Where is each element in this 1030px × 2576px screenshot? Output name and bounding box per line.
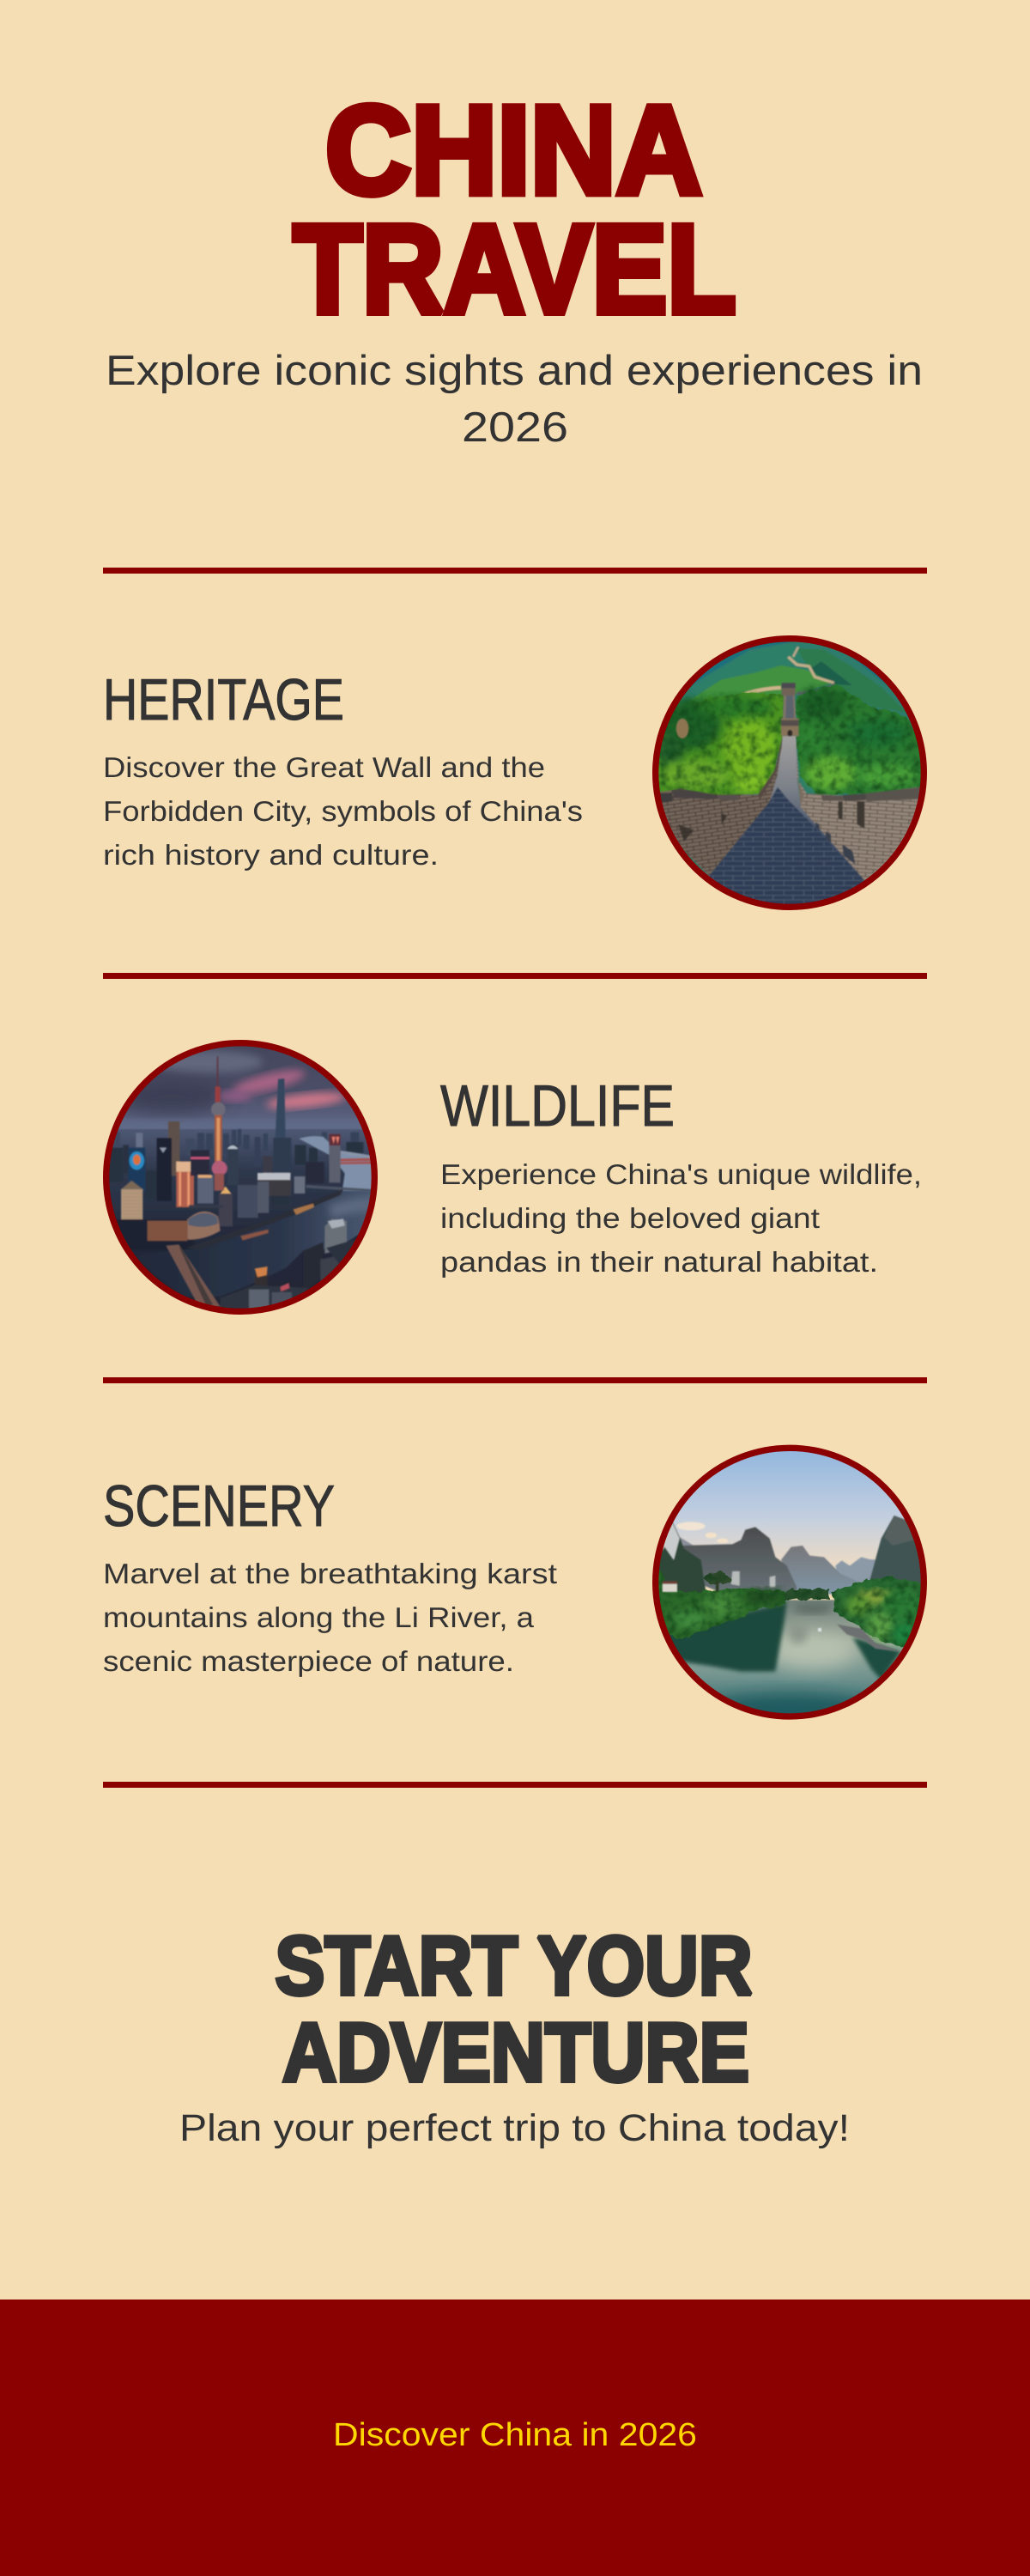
heading: start your adventure: START YOUR	[275, 1918, 752, 2013]
ring	[656, 639, 924, 907]
image: shanghai skyline	[103, 1039, 378, 1315]
image: li river	[652, 1445, 927, 1728]
far towers and narrow wall	[781, 687, 797, 696]
city base	[103, 1129, 378, 1315]
foreground right buildings	[324, 1218, 347, 1254]
riverside bridge far	[306, 1185, 371, 1192]
title	[294, 80, 736, 340]
right parapet	[796, 741, 920, 881]
call to action	[179, 1918, 850, 2149]
footer	[0, 2300, 1030, 2576]
subtitle	[106, 348, 923, 451]
heading: wildlife: WILDLIFE	[440, 1073, 675, 1139]
text block: scenery	[103, 1558, 557, 1677]
image: great wall	[652, 635, 927, 910]
heading: start your adventure: ADVENTURE	[282, 2006, 749, 2099]
heading: scenery: SCENERY	[103, 1473, 335, 1539]
text: plan your trip: Plan your perfect trip to China today!	[179, 2107, 850, 2149]
river	[683, 1599, 904, 1710]
panel: wildlife	[103, 1039, 922, 1315]
header	[106, 80, 923, 451]
text block: heritage: Forbidden City, symbols of China's	[103, 795, 583, 827]
ring	[106, 1043, 374, 1311]
text block: heritage: rich history and culture.	[103, 839, 439, 871]
divider	[103, 568, 927, 574]
text block: heritage: Discover the Great Wall and the	[103, 751, 545, 783]
text block: scenery: mountains along the Li River, a	[103, 1601, 535, 1633]
river	[165, 1190, 371, 1297]
river reflections	[652, 1603, 787, 1672]
text block: scenery: scenic masterpiece of nature.	[103, 1645, 514, 1677]
foreground towers left	[168, 1121, 179, 1176]
text block: wildlife: including the beloved giant	[440, 1202, 820, 1234]
oriental pearl tower	[216, 1056, 219, 1086]
text block: heritage	[103, 751, 583, 871]
left and right forest	[652, 684, 927, 801]
panel: scenery	[103, 1445, 927, 1728]
subtitle: 2026	[462, 404, 568, 451]
text block: wildlife: Experience China's unique wildlife,	[440, 1158, 922, 1190]
title: TRAVEL	[294, 199, 736, 340]
divider	[103, 1782, 927, 1788]
text block: wildlife	[440, 1158, 922, 1278]
low buildings	[103, 1219, 195, 1251]
far river bend	[299, 1135, 372, 1192]
footer text: Discover China in 2026	[333, 2417, 697, 2453]
shanghai tower	[276, 1078, 286, 1139]
text block: wildlife: pandas in their natural habitat.	[440, 1246, 878, 1278]
title: CHINA	[325, 80, 702, 221]
heading: start your adventure	[275, 1918, 752, 2099]
ring	[656, 1448, 924, 1716]
left parapet	[660, 748, 780, 876]
tree banks	[652, 1569, 927, 1649]
subtitle: Explore iconic sights and experiences in	[106, 348, 923, 394]
panel: heritage	[103, 635, 927, 910]
bridge	[166, 1244, 221, 1307]
footer band	[0, 2300, 1030, 2576]
text block: scenery: Marvel at the breathtaking karst	[103, 1558, 557, 1589]
heading: heritage: HERITAGE	[103, 667, 344, 732]
walkway	[709, 736, 869, 910]
divider	[103, 973, 927, 979]
divider	[103, 1377, 927, 1383]
